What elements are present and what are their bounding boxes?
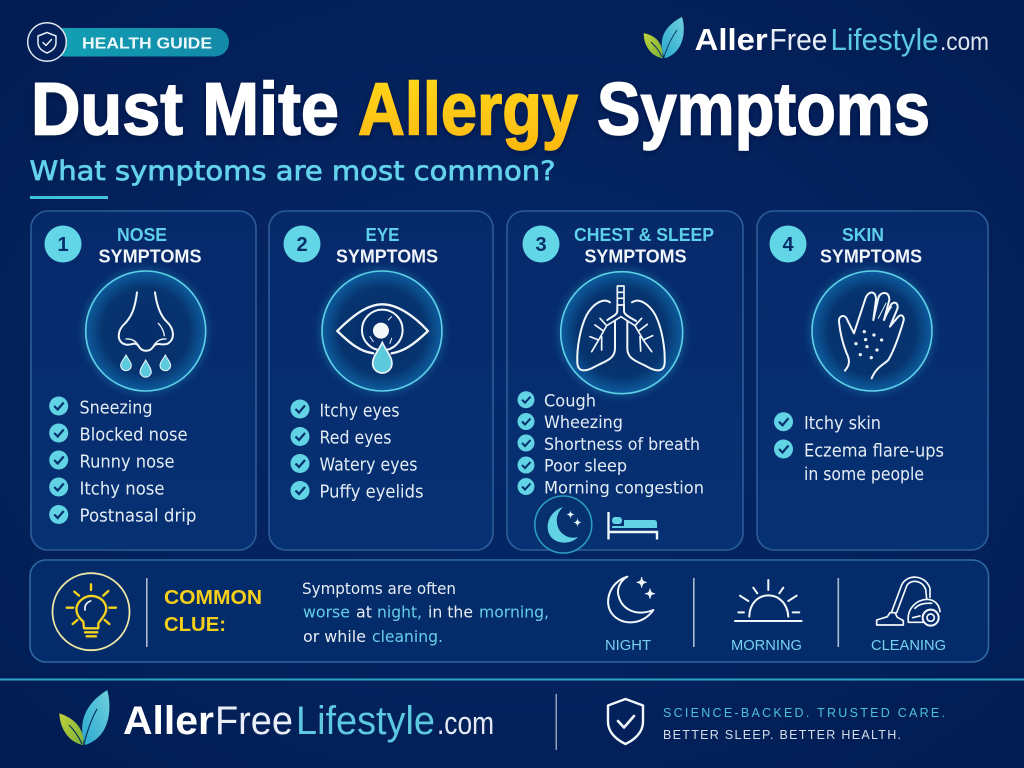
logo: footer: .com [437,705,494,741]
tagline: BETTER SLEEP. BETTER HEALTH. [663,728,901,742]
icon: light bulb [52,573,130,650]
label: night: NIGHT [605,638,651,654]
text: common clue description: in the [428,603,473,622]
number badge 3 [522,226,560,262]
label: cleaning: CLEANING [871,638,946,654]
list: chest and sleep symptoms: Shortness of breath [544,435,700,455]
text: common clue description: morning, [479,603,549,622]
logo: footer: Free [215,699,293,743]
list: skin symptoms: in some people [804,465,924,485]
icon: moon in circle [535,496,592,553]
heading: skin: SKIN [842,225,884,245]
label: morning: MORNING [731,638,802,654]
text: common clue description [302,579,549,646]
list: nose symptoms: Runny nose [80,452,174,472]
tagline: SCIENCE-BACKED. TRUSTED CARE. [663,706,945,720]
logo: footer: Aller [123,699,214,743]
number badge 2 [284,226,320,262]
list: nose symptoms: Itchy nose [80,480,164,500]
icon: eye with tear [319,268,445,394]
logo: top right: .com [940,28,989,56]
title [31,68,930,150]
heading: eye: SYMPTOMS [336,246,438,266]
list: skin symptoms: Eczema flare-ups [804,442,944,462]
icon: morning sun [735,580,802,621]
text: common clue description: at [356,603,372,622]
icon: lungs [558,269,686,397]
heading: chest and sleep [574,225,714,266]
list: eye symptoms [290,400,424,502]
logo: top right: Lifestyle [830,22,938,57]
list: chest and sleep symptoms: Poor sleep [544,456,627,476]
number badge 3: 3 [535,234,547,256]
list: eye symptoms: Puffy eyelids [320,482,424,502]
heading: chest and sleep: SYMPTOMS [584,246,686,266]
heading: nose [98,225,202,266]
list: chest and sleep symptoms: Morning congestion [544,478,704,498]
panel: skin symptoms [757,211,988,550]
number badge 4: 4 [782,234,794,256]
text: common clue description: Symptoms are often [302,579,456,598]
text: common clue description: cleaning. [372,627,443,646]
tagline [663,706,945,742]
icon: night moon [608,577,655,622]
title: Allergy [358,68,578,150]
list: nose symptoms: Blocked nose [80,426,188,446]
panel: eye symptoms [269,211,493,550]
icon: hand with rash [809,268,935,394]
list: chest and sleep symptoms: Wheezing [544,413,623,433]
badge: health guide [28,23,229,61]
logo: top right: Free [770,22,828,57]
panel: chest and sleep symptoms [507,211,743,553]
heading: common clue: COMMON [164,587,262,609]
list: skin symptoms [774,412,944,485]
list: eye symptoms: Watery eyes [320,456,418,476]
logo: top right: Aller [695,22,768,57]
badge: health guide: HEALTH GUIDE [82,36,212,52]
list: eye symptoms: Red eyes [320,428,392,448]
list: nose symptoms [49,396,197,526]
icon: bed [608,512,657,540]
subtitle: What symptoms are most common? [30,156,556,187]
panel: nose symptoms [31,211,256,550]
panel: common clue [30,560,988,662]
icon: vacuum cleaner [877,577,940,626]
title: Dust Mite [31,68,339,150]
heading: common clue [164,587,262,636]
number badge 2: 2 [296,234,308,256]
heading: eye: EYE [366,225,400,245]
heading: eye [336,225,438,266]
number badge 4 [770,226,806,262]
list: nose symptoms: Postnasal drip [80,506,196,526]
logo: footer: Lifestyle [296,699,435,743]
number badge 1 [44,226,82,262]
heading: common clue: CLUE: [164,614,226,636]
text: common clue description: worse [303,603,350,622]
icon: shield check [608,699,643,744]
heading: chest and sleep: CHEST & SLEEP [574,225,714,245]
logo: footer [59,690,494,745]
title: Symptoms [597,68,930,150]
heading: nose: SYMPTOMS [98,246,202,266]
list: skin symptoms: Itchy skin [804,414,881,434]
heading: skin: SYMPTOMS [820,246,922,266]
logo: top right [644,17,989,58]
heading: nose: NOSE [117,225,167,245]
text: common clue description: night, [377,603,422,622]
icon: nose with drops [83,268,209,394]
number badge 1: 1 [57,234,69,256]
list: eye symptoms: Itchy eyes [320,402,400,422]
list: nose symptoms: Sneezing [80,398,152,418]
heading: skin [820,225,922,266]
list: chest and sleep symptoms: Cough [544,392,596,412]
list: chest and sleep symptoms [518,391,704,498]
text: common clue description: or while [303,627,366,646]
